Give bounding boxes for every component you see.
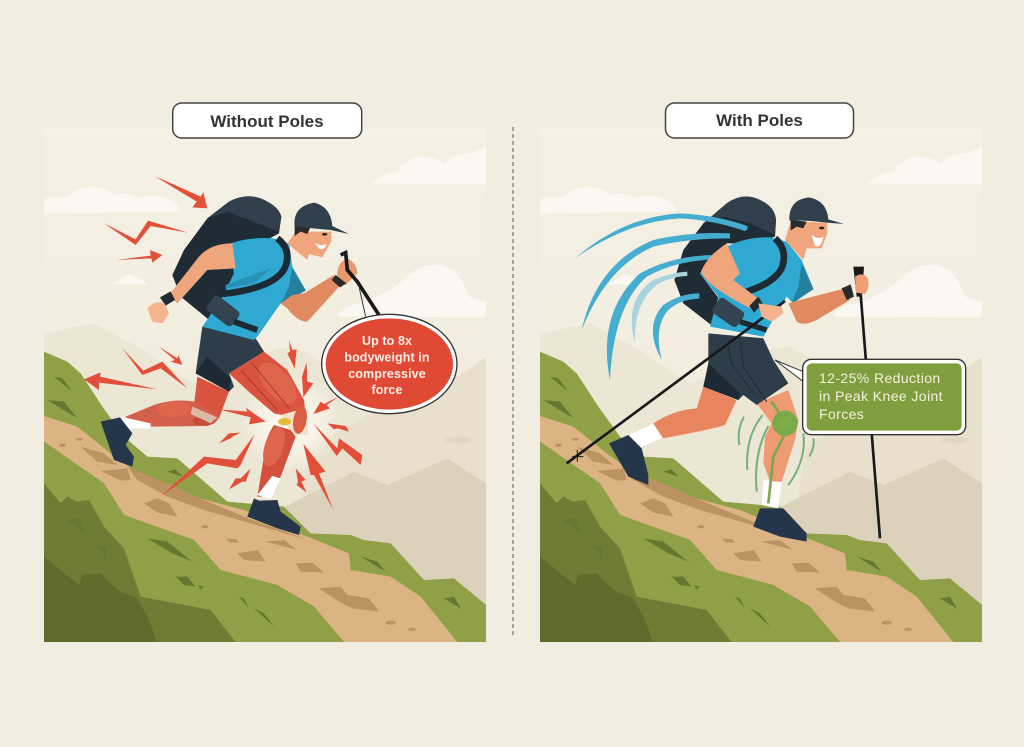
green knee support: [739, 402, 814, 503]
dashed divider: [512, 127, 514, 637]
shoulder strap: [747, 238, 784, 292]
shirt: [700, 237, 813, 337]
pain arrows and bolts: [84, 176, 362, 510]
rear arm: [169, 243, 236, 303]
dirt trail: [44, 416, 457, 642]
callout text: in Peak Knee Joint: [819, 388, 943, 404]
callout text: [819, 370, 943, 422]
figure: hiker with poles: [567, 197, 880, 542]
knee glow: [241, 373, 341, 473]
shorts: [703, 333, 788, 405]
blue motion swooshes: [575, 213, 748, 380]
speech bubble text: [344, 334, 430, 397]
trail stones: [59, 438, 416, 631]
backpack: [674, 197, 776, 327]
upper grass slope: [44, 352, 486, 642]
lower grass: [44, 442, 344, 642]
shirt: [202, 238, 306, 340]
head and cap: [785, 222, 827, 260]
distant mountains: [44, 323, 486, 642]
back leg: [609, 387, 737, 485]
front leg: [739, 390, 814, 542]
hip pack: [711, 296, 746, 329]
hillside scenery copy: [540, 127, 982, 642]
heading: Without Poles: Without Poles: [210, 112, 324, 131]
left trekking pole: [567, 301, 785, 463]
speech bubble text: Up to 8x: [362, 334, 412, 348]
callout text: 12-25% Reduction: [819, 370, 941, 386]
heading: With Poles: With Poles: [716, 111, 803, 130]
heading: With Poles: [666, 103, 854, 138]
muscled front leg: [229, 352, 309, 535]
front arm and glove: [788, 288, 850, 324]
right trekking pole: [859, 273, 880, 538]
callout box shape: [775, 359, 966, 435]
grass tufts: [47, 377, 461, 627]
panel: without poles: [44, 127, 486, 642]
speech bubble text: compressive: [348, 367, 426, 381]
backpack: [172, 196, 281, 327]
speech bubble text: force: [371, 383, 403, 397]
head and cap: [287, 232, 331, 260]
speech bubble shape: [322, 314, 457, 414]
shoulder strap: [222, 238, 287, 294]
callout text: Forces: [819, 406, 864, 422]
front arm and glove: [281, 275, 341, 322]
clouds: [44, 145, 486, 317]
back leg: [101, 377, 229, 467]
speech bubble text: bodyweight in: [344, 350, 430, 364]
rear arm: [701, 243, 760, 310]
panel: with poles: [540, 127, 982, 642]
figure: hiker without poles: [101, 196, 379, 535]
heading: Without Poles: [173, 103, 362, 138]
shorts: [196, 327, 264, 392]
hip pack: [205, 294, 241, 328]
hillside scenery: [44, 127, 486, 642]
trekking pole: [341, 253, 379, 315]
